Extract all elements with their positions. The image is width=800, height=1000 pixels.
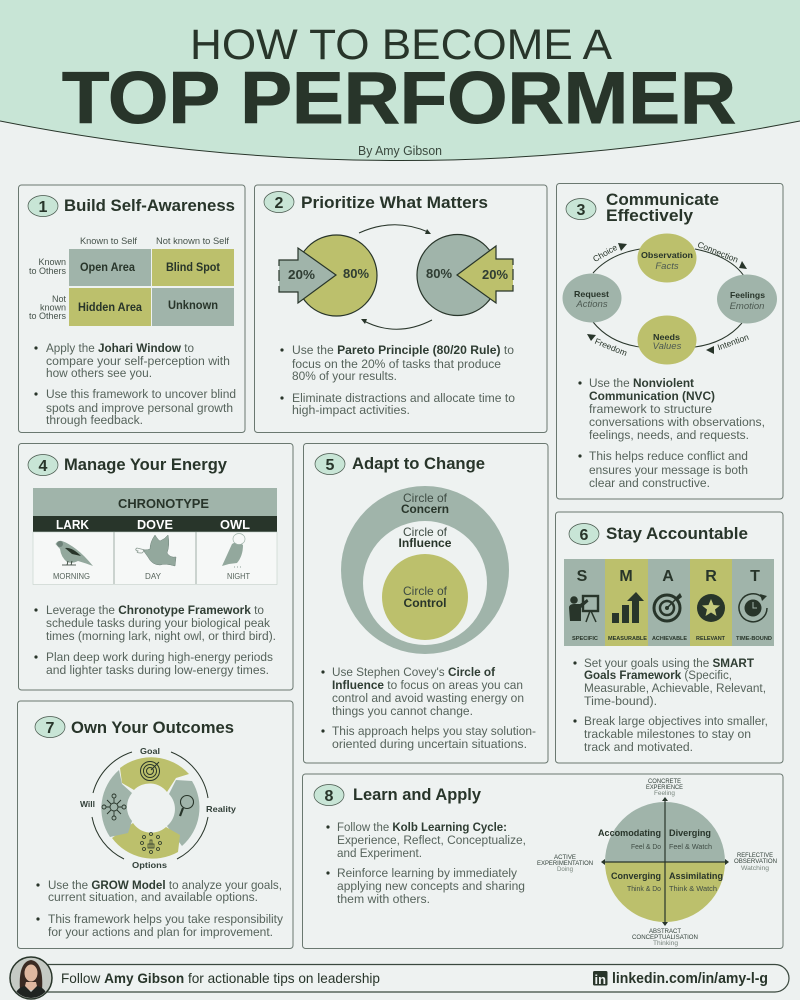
icon: linkedin: in (594, 973, 606, 987)
bullets 7 (36, 878, 284, 939)
kolb learning cycle chart: ABSTRACT (649, 929, 681, 935)
panel 8: learn and apply (302, 774, 783, 948)
icon: presenter at board (569, 596, 598, 622)
bullets 7: current situation, and available options. (48, 890, 258, 904)
kolb learning cycle chart: Feel & Watch (669, 842, 712, 851)
heading 1: Build Self-Awareness (64, 196, 235, 215)
bullets 2: Use the Pareto Principle (80/20 Rule) to (292, 343, 514, 357)
kolb learning cycle chart: Accomodating (598, 828, 661, 839)
chronotype table (33, 488, 277, 584)
panel 6: stay accountable (556, 512, 783, 763)
number badge 7 (35, 716, 65, 738)
bullets 5 (321, 665, 536, 751)
panel 7: own your outcomes (18, 701, 293, 948)
panel 3: communicate effectively (556, 184, 783, 499)
panel 5: adapt to change (304, 444, 548, 763)
bullets 1: through feedback. (46, 413, 143, 427)
icon: owl (222, 534, 245, 567)
johari window: to Others (29, 311, 66, 321)
bullets 2 (280, 343, 515, 417)
panel 1: build self-awareness (18, 185, 245, 432)
bullets 6: Goals Framework (Specific, (584, 668, 732, 682)
heading 5: Adapt to Change (352, 454, 485, 473)
number badge 6: 6 (580, 527, 589, 544)
bullets 4: Leverage the Chronotype Framework to (46, 603, 264, 617)
circles of concern, influence, control: Control (404, 596, 446, 610)
bullets 8: Reinforce learning by immediately (337, 866, 518, 880)
pareto diagram (279, 225, 513, 329)
grow model cycle: Options (132, 860, 167, 870)
nvc cycle diagram: Request (574, 289, 609, 299)
bullets 6: Set your goals using the SMART (584, 656, 754, 670)
bullets 4: Plan deep work during high-energy periods (46, 650, 273, 664)
number badge 1 (28, 196, 58, 216)
icon: magnifier (180, 796, 194, 816)
bullets 8: and Experiment. (337, 846, 422, 860)
bullets 3: clear and constructive. (589, 476, 710, 490)
smart goals chart: R (705, 568, 717, 585)
number badge 3: 3 (577, 202, 586, 219)
johari window: Known (38, 257, 66, 267)
bullets 6: trackable milestones to stay on (584, 727, 751, 741)
grow model cycle (80, 746, 236, 870)
smart goals chart: S (577, 568, 588, 585)
number badge 5 (315, 454, 345, 474)
bullets 6: Break large objectives into smaller, (584, 714, 768, 728)
bullets 1: Apply the Johari Window to (46, 341, 194, 355)
chronotype table: DAY (145, 571, 161, 581)
bullets 7: for your actions and plan for improvement. (48, 925, 273, 939)
bullets 4: and lighter tasks during low-energy times. (46, 663, 269, 677)
johari window: Unknown (168, 300, 218, 312)
nvc cycle diagram: Intention (716, 332, 750, 352)
number badge 1: 1 (39, 199, 48, 216)
kolb learning cycle chart: Assimilating (669, 871, 723, 882)
bullets 5: Use Stephen Covey's Circle of (332, 665, 496, 679)
bullets 7: Use the GROW Model to analyze your goals, (48, 878, 282, 892)
number badge 4: 4 (39, 458, 48, 475)
nvc cycle diagram: Observation (641, 250, 693, 260)
bullets 3: ensures your message is both (589, 463, 748, 477)
circles of concern, influence, control: Circle of (403, 525, 448, 539)
bullets 3: Use the Nonviolent (589, 376, 694, 390)
nvc cycle diagram (562, 234, 777, 364)
follow text: Follow Amy Gibson for actionable tips on leadership (61, 970, 380, 986)
nvc cycle diagram: Freedom (593, 336, 629, 358)
number badge 6 (569, 524, 599, 544)
nvc cycle diagram: Needs (653, 332, 680, 342)
panel 4: manage your energy (18, 444, 293, 690)
smart goals chart: MEASURABLE (608, 636, 647, 642)
bullets 1: how others see you. (46, 366, 152, 380)
bullets 1: compare your self-perception with (46, 354, 230, 368)
bullets 4: schedule tasks during your biological peak (46, 616, 271, 630)
kolb learning cycle chart (537, 779, 777, 947)
johari window: Not (52, 294, 66, 304)
bullets 8: Experience, Reflect, Conceptualize, (337, 833, 526, 847)
heading 2: Prioritize What Matters (301, 193, 488, 212)
bullets 4: times (morning lark, night owl, or third bird). (46, 629, 276, 643)
circles of concern, influence, control: Concern (401, 502, 449, 516)
pareto diagram: 80% (426, 267, 452, 281)
title: HOW TO BECOME A (190, 21, 612, 69)
bullets 5: Influence to focus on areas you can (332, 678, 523, 692)
circles of concern, influence, control (341, 486, 509, 654)
heading 3: Effectively (606, 206, 694, 225)
bullets 7: This framework helps you take responsibility (48, 912, 284, 926)
bullets 4 (34, 603, 276, 677)
number badge 2 (264, 192, 294, 212)
heading 4: Manage Your Energy (64, 455, 228, 474)
bullets 1: spots and improve personal growth (46, 401, 233, 415)
bullets 3: Communication (NVC) (589, 389, 715, 403)
pareto diagram: 80% (343, 267, 369, 281)
bullets 6 (573, 656, 768, 754)
heading 6: Stay Accountable (606, 524, 748, 543)
kolb learning cycle chart: Doing (557, 867, 573, 873)
icon: lark (56, 541, 93, 566)
title: TOP PERFORMER (62, 58, 736, 139)
kolb learning cycle chart: Diverging (669, 828, 711, 839)
pareto diagram: 20% (288, 268, 315, 282)
heading 8: Learn and Apply (353, 785, 482, 804)
johari window: Not known to Self (156, 236, 230, 246)
smart goals chart: TIME-BOUND (736, 636, 772, 642)
smart goals chart (564, 559, 774, 646)
bullets 3 (578, 376, 765, 490)
smart goals chart: ACHIEVABLE (652, 636, 687, 642)
bullets 2: 80% of your results. (292, 369, 397, 383)
panel 2: prioritize what matters (254, 185, 547, 432)
kolb learning cycle chart: Think & Watch (669, 884, 717, 893)
grow model cycle: Goal (140, 746, 160, 756)
circles of concern, influence, control: Circle of (403, 491, 448, 505)
grow model cycle: Will (80, 799, 95, 809)
icon: rising bars (612, 592, 644, 623)
heading 3 (606, 190, 719, 225)
number badge 3 (566, 198, 596, 220)
bullets 8 (326, 820, 526, 906)
smart goals chart: A (662, 568, 674, 585)
number badge 7: 7 (46, 720, 55, 737)
smart goals chart: T (750, 568, 760, 585)
nvc cycle diagram: Connection (696, 239, 740, 265)
number badge 4 (28, 454, 58, 476)
bullets 6: Measurable, Achievable, Relevant, (584, 681, 766, 695)
bullets 5: This approach helps you stay solution- (332, 724, 536, 738)
nvc cycle diagram: Feelings (730, 290, 765, 300)
footer bar (10, 957, 789, 1000)
johari window: Hidden Area (78, 302, 143, 314)
bullets 5: control and avoid wasting energy on (332, 691, 524, 705)
chronotype table: NIGHT (227, 571, 250, 581)
number badge 2: 2 (275, 195, 284, 212)
bullets 8: applying new concepts and sharing (337, 879, 525, 893)
chronotype table: MORNING (53, 571, 90, 581)
kolb learning cycle chart: CONCRETE (648, 779, 681, 785)
byline: By Amy Gibson (358, 144, 442, 158)
bullets 2: Eliminate distractions and allocate time to (292, 391, 515, 405)
linkedin url: linkedin.com/in/amy-l-g (612, 971, 768, 987)
nvc cycle diagram: Actions (575, 299, 608, 310)
smart goals chart: RELEVANT (696, 636, 726, 642)
heading 3: Communicate (606, 190, 719, 209)
chronotype table: OWL (220, 517, 250, 532)
smart goals chart: SPECIFIC (572, 636, 598, 642)
bullets 8: Follow the Kolb Learning Cycle: (337, 820, 507, 834)
kolb learning cycle chart: Feel & Do (631, 842, 661, 851)
bullets 1: Use this framework to uncover blind (46, 387, 236, 401)
icon: linkedin (593, 971, 608, 987)
nvc cycle diagram: Choice (591, 242, 619, 264)
kolb learning cycle chart: Feeling (654, 791, 675, 797)
kolb learning cycle chart: Thinking (653, 941, 678, 947)
bullets 6: Time-bound). (584, 694, 657, 708)
kolb learning cycle chart: OBSERVATION (734, 859, 777, 865)
johari window: to Others (29, 266, 66, 276)
johari window: known (40, 302, 66, 312)
smart goals chart: M (619, 568, 633, 585)
kolb learning cycle chart: Think & Do (627, 884, 661, 893)
nvc cycle diagram: Emotion (730, 301, 764, 312)
icon: goal target (140, 762, 160, 780)
johari window: Open Area (80, 262, 136, 274)
number badge 5: 5 (326, 457, 335, 474)
number badge 8 (314, 784, 344, 806)
title (62, 21, 736, 139)
number badge 8: 8 (325, 788, 334, 805)
author avatar (10, 957, 52, 1000)
kolb learning cycle chart: EXPERIENCE (646, 785, 683, 791)
nvc cycle diagram: Facts (655, 261, 679, 272)
kolb learning cycle chart: ACTIVE (554, 855, 576, 861)
bullets 2: high-impact activities. (292, 403, 410, 417)
grow model cycle: Reality (206, 804, 236, 814)
chronotype table: CHRONOTYPE (118, 496, 209, 511)
icon: target (654, 593, 682, 621)
bullets 1 (34, 341, 236, 427)
bullets 5: oriented during uncertain situations. (332, 737, 527, 751)
bullets 3: This helps reduce conflict and (589, 449, 748, 463)
bullets 3: feelings, needs, and requests. (589, 428, 749, 442)
kolb learning cycle chart: CONCEPTUALISATION (632, 935, 698, 941)
bullets 3: framework to structure (589, 402, 712, 416)
icon: clock with arrow (739, 594, 767, 622)
icon: star badge (697, 594, 725, 622)
bullets 8: them with others. (337, 892, 430, 906)
kolb learning cycle chart: Watching (741, 866, 769, 872)
kolb learning cycle chart: Converging (611, 871, 661, 882)
heading 7: Own Your Outcomes (71, 718, 234, 737)
kolb learning cycle chart: REFLECTIVE (737, 853, 773, 859)
johari window (29, 236, 234, 326)
johari window: Blind Spot (166, 262, 220, 274)
chronotype table: LARK (56, 517, 90, 532)
bullets 6: track and motivated. (584, 740, 693, 754)
icon: network (102, 794, 126, 820)
kolb learning cycle chart: EXPERIMENTATION (537, 861, 593, 867)
icon: dove (136, 535, 176, 566)
johari window: Known to Self (80, 236, 137, 246)
bullets 3: conversations with observations, (589, 415, 765, 429)
bullets 5: things you cannot change. (332, 704, 473, 718)
icon: options dots (140, 832, 162, 854)
pareto diagram: 20% (482, 268, 508, 282)
header banner (0, 0, 800, 160)
nvc cycle diagram: Values (653, 341, 682, 352)
chronotype table: DOVE (137, 517, 173, 532)
circles of concern, influence, control: Circle of (403, 584, 448, 598)
circles of concern, influence, control: Influence (398, 536, 452, 550)
bullets 2: focus on the 20% of tasks that produce (292, 357, 501, 371)
